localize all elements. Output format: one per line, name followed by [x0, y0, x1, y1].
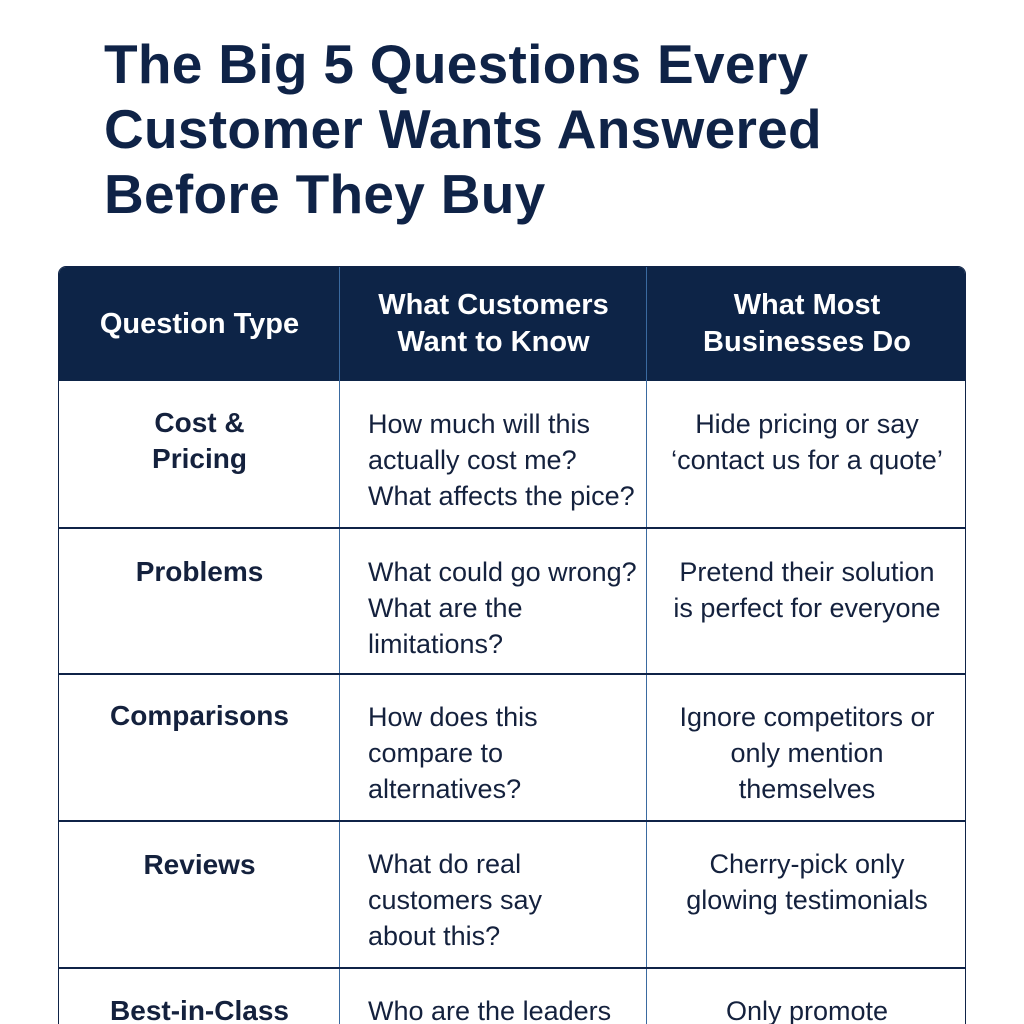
row: reviews: customers say [368, 885, 542, 915]
title: Customer Wants Answered [104, 98, 822, 160]
header: what customers want: What Customers [378, 289, 609, 321]
row: reviews: Reviews [143, 849, 256, 880]
row: reviews [143, 849, 928, 951]
header: what businesses do: Businesses Do [703, 326, 911, 358]
row: comparisons: themselves [739, 774, 875, 804]
row: problems: What could go wrong? [368, 557, 637, 587]
row: cost & pricing: Cost & [154, 407, 245, 438]
row: cost & pricing [152, 407, 943, 511]
row: comparisons: compare to [368, 738, 503, 768]
row: cost & pricing: ‘contact us for a quote’ [671, 445, 943, 475]
header: question type: Question Type [100, 308, 299, 340]
header: what businesses do [703, 289, 911, 358]
row: reviews: What do real [368, 849, 521, 879]
row: problems: Pretend their solution [679, 557, 935, 587]
row: comparisons: Comparisons [110, 700, 289, 731]
row: comparisons: How does this [368, 702, 538, 732]
row: reviews: about this? [368, 921, 500, 951]
row: cost & pricing: Hide pricing or say [695, 409, 919, 439]
title [104, 33, 822, 225]
row: comparisons [110, 700, 935, 804]
row: reviews: Cherry-pick only [709, 849, 905, 879]
row: comparisons: alternatives? [368, 774, 521, 804]
table [58, 266, 966, 1024]
header row [59, 267, 967, 381]
row: comparisons: Ignore competitors or [679, 702, 935, 732]
header: what customers want [378, 289, 609, 358]
row: cost & pricing: What affects the pice? [368, 481, 635, 511]
header: what businesses do: What Most [734, 289, 880, 321]
row: cost & pricing: Pricing [152, 443, 247, 474]
row: problems: is perfect for everyone [673, 593, 941, 623]
row: problems [136, 556, 941, 659]
title: Before They Buy [104, 163, 546, 225]
row: problems: What are the [368, 593, 523, 623]
row: cost & pricing: actually cost me? [368, 445, 577, 475]
title: The Big 5 Questions Every [104, 33, 808, 95]
row: problems: Problems [136, 556, 263, 587]
header: what customers want: Want to Know [397, 326, 590, 358]
row: problems: limitations? [368, 629, 503, 659]
row: cost & pricing: How much will this [368, 409, 590, 439]
row: best-in-class [110, 995, 888, 1024]
row: reviews: glowing testimonials [686, 885, 928, 915]
row: comparisons: only mention [730, 738, 884, 768]
